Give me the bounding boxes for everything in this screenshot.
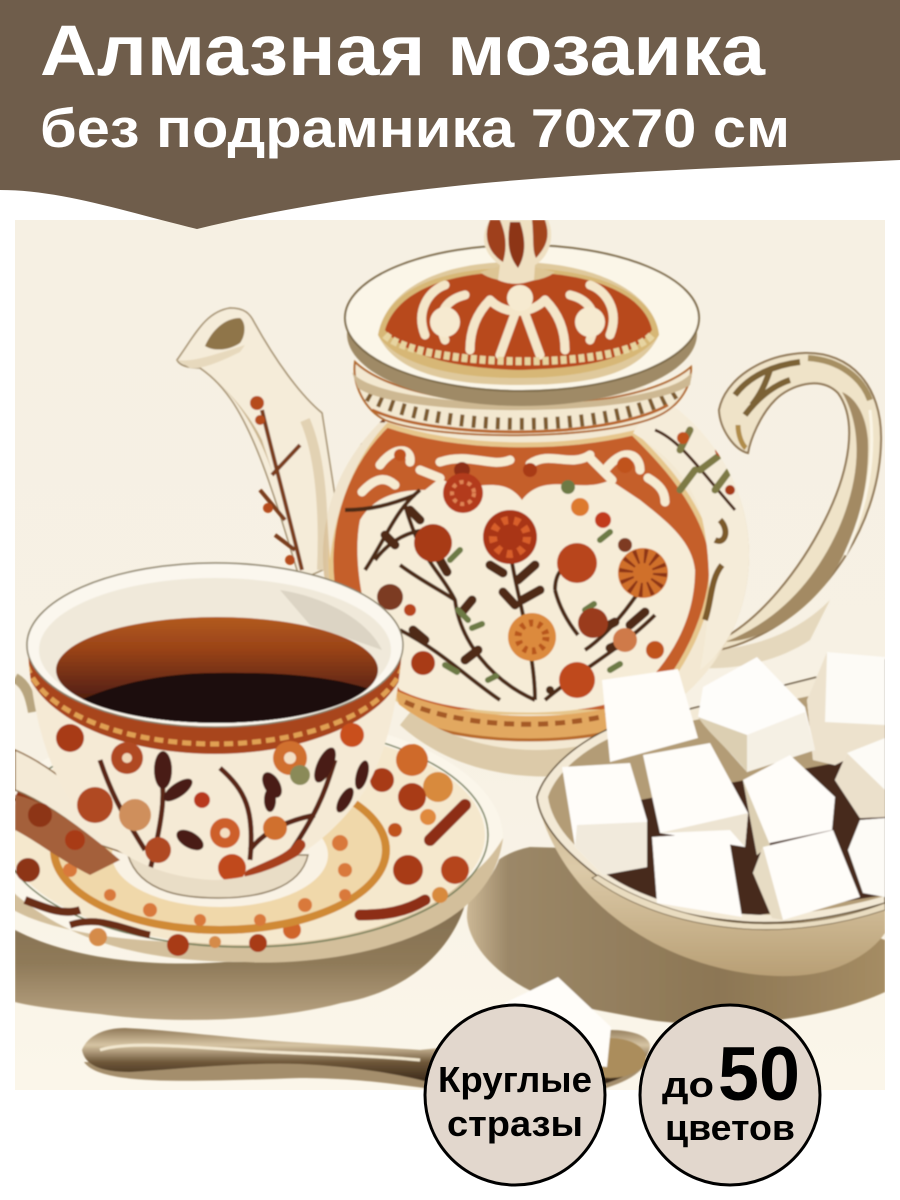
cube left front xyxy=(562,763,647,875)
background xyxy=(15,220,885,1090)
teapot spout xyxy=(177,308,345,580)
cup xyxy=(15,550,407,882)
spoon shadow xyxy=(84,1060,648,1090)
badge: round rhinestones: Круглые xyxy=(438,1059,592,1100)
lid xyxy=(345,245,699,406)
lid knob xyxy=(484,220,551,284)
table shadows xyxy=(15,600,885,1024)
subtitle: без подрамника 70х70 см xyxy=(40,97,790,159)
cube top-left xyxy=(602,669,698,762)
cube front center xyxy=(652,832,742,917)
badge: up to 50 colours xyxy=(640,1005,820,1185)
title: Алмазная мозаика xyxy=(40,12,766,91)
bottom band xyxy=(396,690,608,742)
medallion cream panel xyxy=(357,478,695,712)
bowl exterior xyxy=(542,819,885,976)
cup band xyxy=(28,658,402,755)
upper scrolls xyxy=(362,451,665,502)
badge: up to 50 colours: до xyxy=(662,1064,714,1105)
cup foot xyxy=(128,855,308,898)
cup floral pattern xyxy=(100,760,335,870)
loose sugar cube xyxy=(505,977,611,1067)
left decoration side xyxy=(326,419,388,558)
spoon xyxy=(82,1028,650,1090)
badge: round rhinestones xyxy=(425,1005,605,1185)
cube back xyxy=(698,657,815,772)
tea xyxy=(56,617,378,730)
cup handle xyxy=(15,678,130,875)
right decoration side xyxy=(632,426,750,653)
collar band xyxy=(352,362,692,435)
badge: up to 50 colours: цветов xyxy=(665,1107,795,1148)
header banner xyxy=(0,0,900,229)
teapot handle xyxy=(700,353,881,652)
cube front right xyxy=(753,830,860,920)
cube middle xyxy=(643,743,748,847)
cup body xyxy=(32,682,398,880)
badge: round rhinestones: стразы xyxy=(447,1103,583,1144)
saucer gold ring xyxy=(49,800,391,935)
saucer well xyxy=(111,838,329,908)
cube right top xyxy=(807,652,885,765)
badge: up to 50 colours: 50 xyxy=(718,1032,800,1117)
cube right bottom xyxy=(848,818,885,897)
cup rim xyxy=(27,563,403,727)
leaves xyxy=(385,510,645,660)
illustration: tea set xyxy=(0,220,885,1090)
sugar cubes xyxy=(562,652,885,920)
bowl front edge xyxy=(592,875,885,930)
flowers xyxy=(377,473,668,698)
orange panel xyxy=(331,425,712,712)
cube right middle xyxy=(835,738,885,818)
bowl dark interior xyxy=(600,760,885,915)
saucer xyxy=(15,742,504,964)
bowl inside and rim xyxy=(537,660,885,923)
teapot xyxy=(177,220,881,750)
sugar bowl xyxy=(537,652,885,976)
floral stems xyxy=(345,490,655,700)
cube center right xyxy=(743,755,835,855)
teapot body xyxy=(323,387,732,750)
saucer outer flowers xyxy=(15,744,469,956)
